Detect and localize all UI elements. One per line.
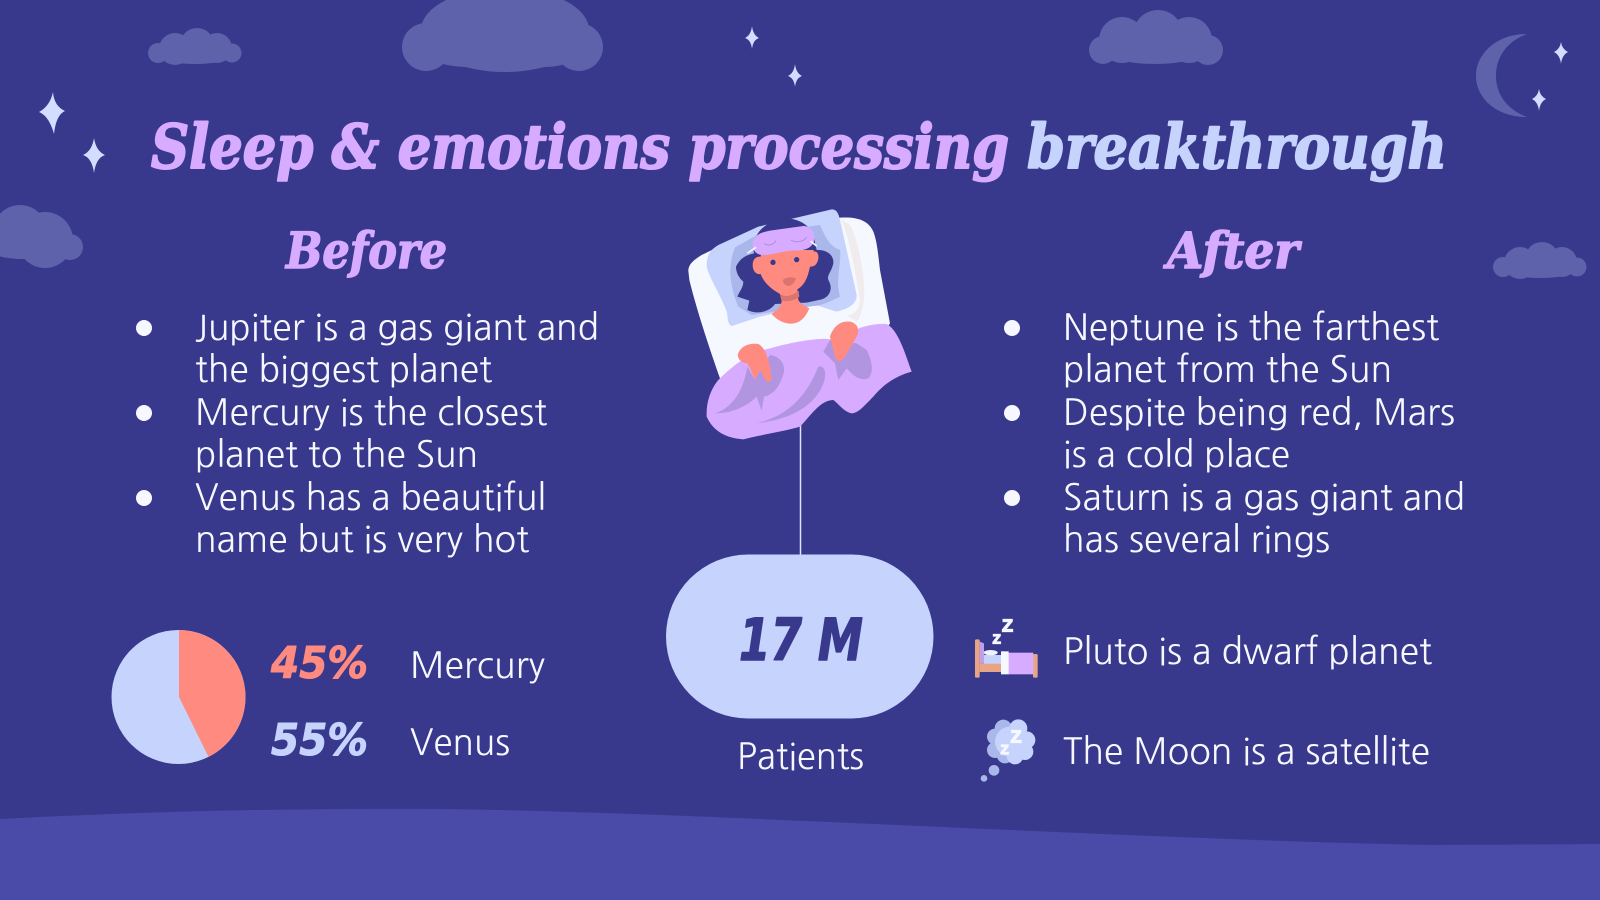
stat: 55% Venus — [271, 715, 510, 766]
before bullet list — [136, 310, 599, 558]
before bullet list: the biggest planet — [195, 352, 492, 388]
icon: bed: Z — [1002, 616, 1013, 636]
illustration: sleeping woman with eye mask — [688, 209, 912, 439]
cloud left edge — [0, 205, 83, 268]
stat: 45% Mercury — [270, 638, 545, 689]
cloud top right — [1089, 10, 1223, 65]
stat: 45% Mercury: Mercury — [410, 648, 545, 684]
pie chart — [112, 630, 246, 764]
after bullet list: Saturn is a gas giant and — [1063, 480, 1465, 516]
icon: bed — [975, 616, 1038, 678]
ground wave — [0, 809, 1600, 900]
title: Sleep & emotions processing — [151, 112, 1009, 183]
text: pluto: Pluto is a dwarf planet — [1063, 634, 1432, 670]
after bullet list: Despite being red, Mars — [1063, 395, 1455, 431]
after bullet list: planet from the Sun — [1063, 352, 1392, 388]
icon: bed: Z — [993, 631, 1001, 646]
heading: before: Before — [284, 221, 447, 280]
patients pill: 17 M — [739, 606, 863, 674]
icon: thought cloud — [981, 719, 1035, 782]
stat: 55% Venus: 55% — [271, 715, 368, 766]
cloud right — [1493, 242, 1586, 279]
moon — [1476, 34, 1527, 117]
before bullet list: Jupiter is a gas giant and — [195, 310, 599, 346]
connector line — [800, 420, 802, 556]
heading: after: After — [1163, 221, 1302, 280]
after bullet list: has several rings — [1063, 522, 1330, 558]
patients pill — [666, 554, 934, 718]
before bullet list: Mercury is the closest — [195, 395, 547, 431]
before bullet list: planet to the Sun — [195, 437, 478, 473]
before bullet list: Venus has a beautiful — [195, 480, 546, 516]
cloud top left small — [148, 28, 242, 65]
title: breakthrough — [1027, 112, 1447, 183]
icon: thought cloud: Z — [1011, 727, 1022, 747]
text: moon: The Moon is a satellite — [1063, 734, 1430, 770]
patients label: Patients — [737, 739, 864, 775]
after bullet list: Neptune is the farthest — [1063, 310, 1439, 346]
before bullet list: name but is very hot — [195, 522, 529, 558]
stat: 55% Venus: Venus — [410, 725, 510, 761]
stat: 45% Mercury: 45% — [270, 638, 368, 689]
cloud top centre large — [402, 0, 603, 72]
after bullet list: is a cold place — [1063, 437, 1290, 473]
after bullet list — [1004, 310, 1465, 558]
icon: thought cloud: Z — [1001, 742, 1009, 757]
stars — [39, 26, 1568, 173]
